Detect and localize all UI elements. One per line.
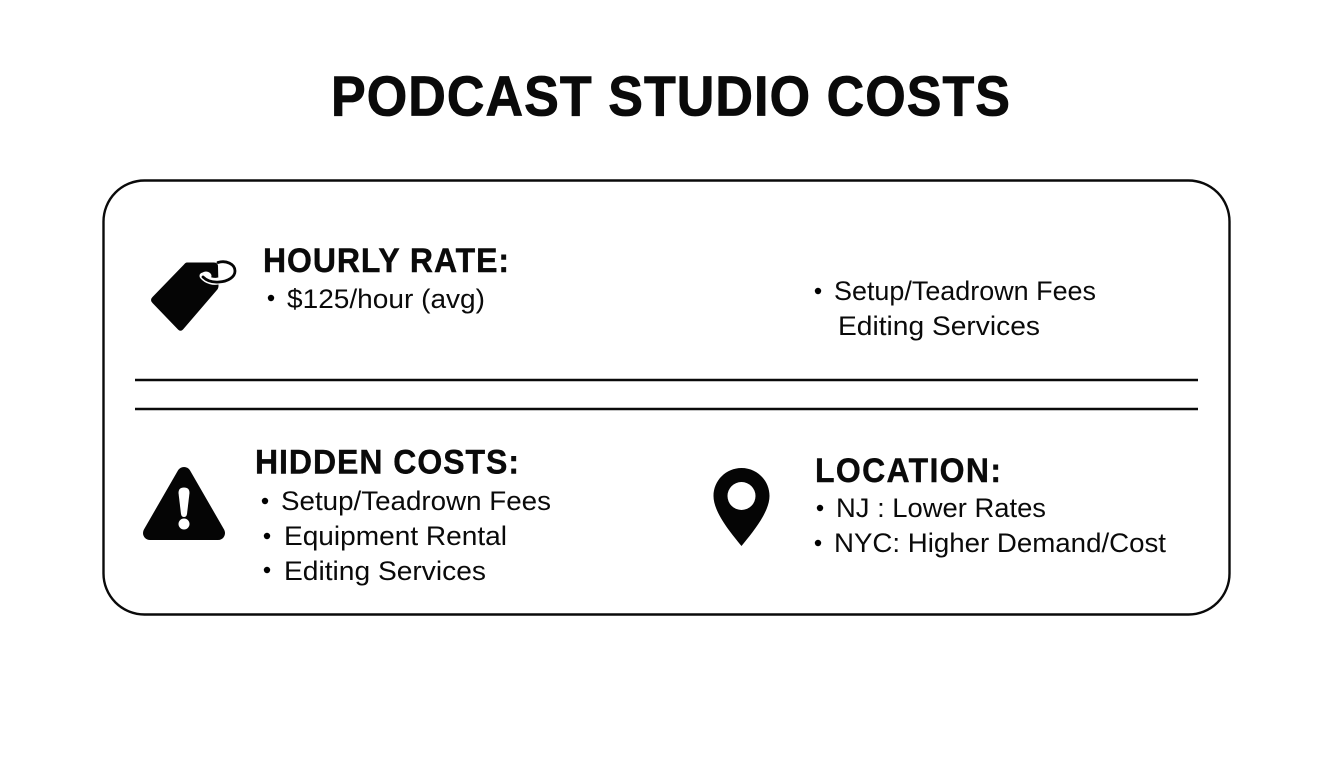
title: PODCAST STUDIO COSTS bbox=[331, 64, 1010, 128]
section: top-right list bbox=[815, 276, 1096, 341]
icon: warning triangle bbox=[150, 474, 218, 533]
section: hidden costs: Setup/Teadrown Fees bbox=[281, 486, 551, 516]
section: location: NJ : Lower Rates bbox=[836, 493, 1046, 523]
section: location: NYC: Higher Demand/Cost bbox=[834, 528, 1167, 558]
section: location bbox=[815, 452, 1167, 558]
section: hourly rate bbox=[263, 242, 509, 314]
section: hourly rate: HOURLY RATE: bbox=[263, 242, 509, 280]
icon: location pin bbox=[714, 468, 770, 546]
section: location: LOCATION: bbox=[815, 452, 1001, 490]
section: top-right list: Setup/Teadrown Fees bbox=[834, 276, 1096, 306]
section: top-right list: Editing Services bbox=[838, 311, 1040, 341]
section: hidden costs: Editing Services bbox=[284, 556, 486, 586]
section: hidden costs: Equipment Rental bbox=[284, 521, 507, 551]
panel: cost summary card bbox=[104, 180, 1230, 614]
section: hourly rate: $125/hour (avg) bbox=[287, 284, 485, 314]
section: hidden costs: HIDDEN COSTS: bbox=[255, 443, 519, 482]
section: hidden costs bbox=[255, 443, 551, 586]
icon: price tag bbox=[151, 262, 235, 331]
